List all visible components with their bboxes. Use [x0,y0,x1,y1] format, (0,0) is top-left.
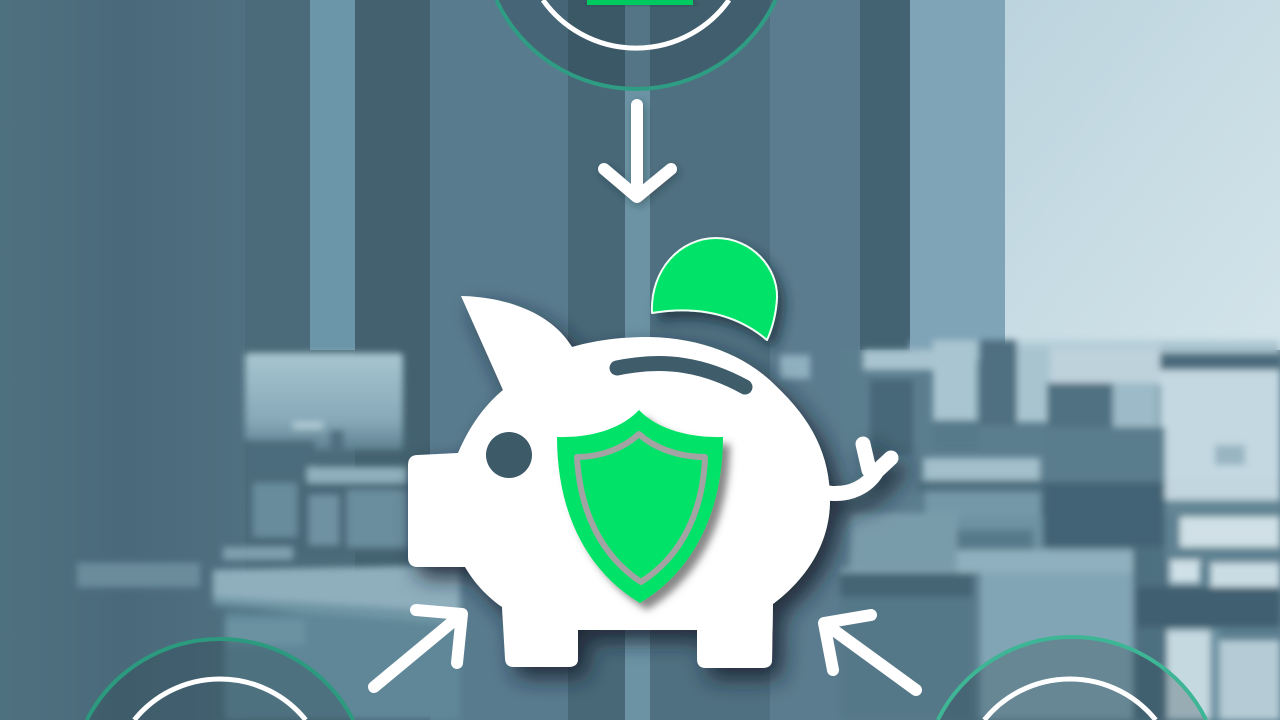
coin slot [617,364,745,387]
right desks, chairs and window [910,340,1005,360]
icon: green coin [652,238,777,340]
icon: shield [557,410,723,603]
bottom left circle badge [87,639,353,720]
arrow: bottom left to piggy bank [374,610,462,687]
arrow: bottom right to piggy bank [824,615,916,690]
pig eye [486,432,532,478]
arrow: down into piggy bank [604,105,671,197]
top circle badge [496,0,776,89]
top badge icon: green base [587,0,693,5]
bottom right circle badge [938,637,1206,720]
icon: piggy bank [408,296,891,668]
pig body [408,296,891,668]
left monitor and desks [245,353,403,450]
